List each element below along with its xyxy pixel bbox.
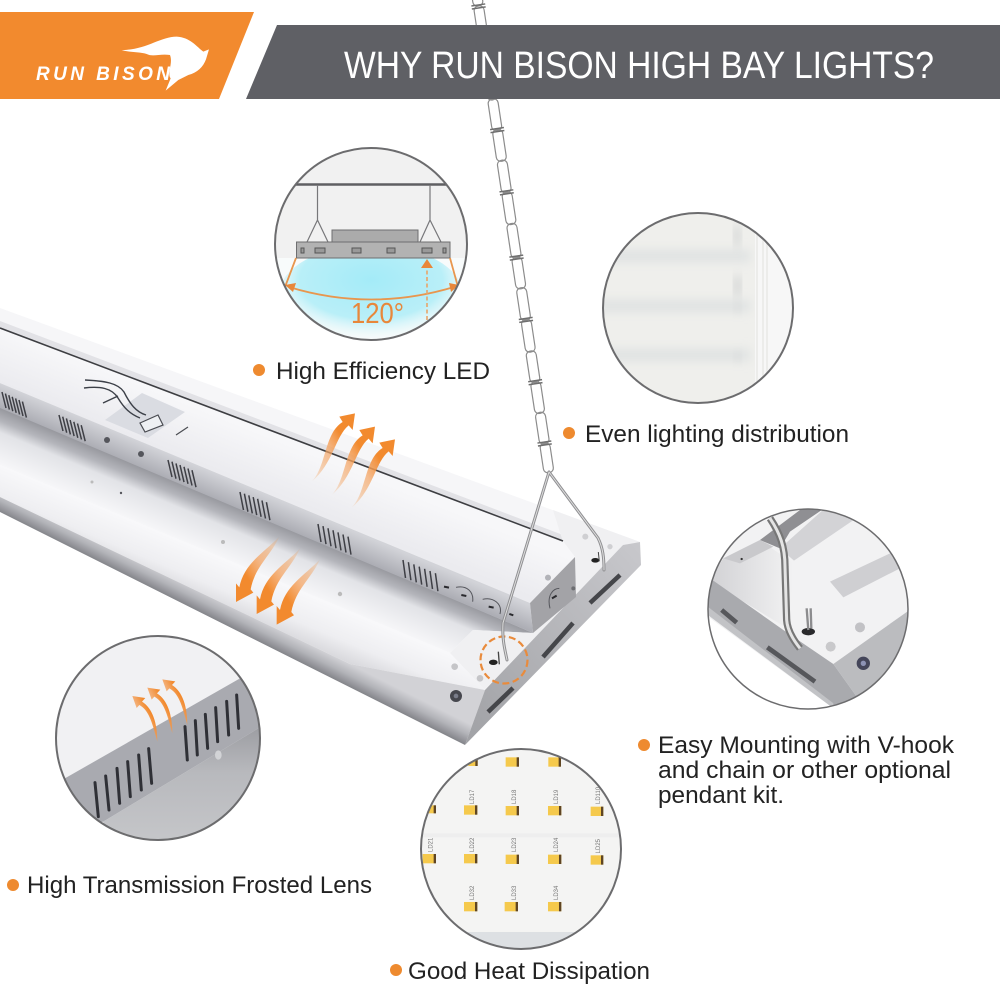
slots <box>722 610 815 682</box>
LED reference labels: LD22 <box>470 837 476 852</box>
label: Easy Mounting: Easy Mounting with V-hook <box>658 732 955 759</box>
fixture: end slots <box>488 575 620 712</box>
fixture: junction box details <box>444 534 613 702</box>
circle: LED board <box>417 745 627 955</box>
fixture: side face <box>0 497 485 745</box>
arc arrowheads <box>285 283 459 292</box>
LED reference labels: LD24 <box>554 837 560 852</box>
label: Easy Mounting: pendant kit. <box>658 782 784 809</box>
fixture: rivets and sensor <box>450 534 613 702</box>
fixture: driver box side <box>530 557 576 633</box>
fixture: vents <box>2 392 438 591</box>
arrows: heat falling <box>236 537 320 625</box>
arrows <box>132 679 187 742</box>
fixture: top flange <box>0 308 640 545</box>
slats <box>95 695 239 817</box>
sensor <box>857 657 870 670</box>
LEDs <box>423 757 603 911</box>
circle: frosted lens vents <box>50 630 267 847</box>
arrows: heat rising <box>312 413 395 508</box>
fixture: channel floor <box>0 405 533 653</box>
ceiling bar <box>296 183 446 186</box>
fixture: front panel <box>0 465 485 690</box>
fixture: driver box top <box>0 328 575 603</box>
fixture: dark seam <box>0 328 563 541</box>
LED reference labels: LD21 <box>429 837 435 852</box>
vent face <box>65 678 258 822</box>
LED reference labels: LD34 <box>554 885 560 900</box>
label: High Transmission Frosted Lens: High Transmission Frosted Lens <box>27 872 372 899</box>
label: High Efficiency LED: High Efficiency LED <box>276 358 490 385</box>
fixture box <box>332 230 418 242</box>
beam edges and arc <box>285 258 458 300</box>
fixture: end cap top <box>450 510 640 690</box>
channel light band <box>786 511 852 560</box>
title: WHY RUN BISON HIGH BAY LIGHTS? <box>344 45 934 87</box>
lower surface <box>103 728 259 839</box>
fixture: driver box front <box>0 383 533 633</box>
LED reference labels: LD33 <box>512 885 518 900</box>
beam glow <box>283 258 459 334</box>
lower rim <box>708 608 834 706</box>
LED reference labels: LD19 <box>554 789 560 804</box>
end bevel <box>834 612 908 696</box>
fixture: screw holes <box>90 437 342 596</box>
LED reference labels: LD17 <box>470 789 476 804</box>
V-hook rods <box>503 472 604 660</box>
LED reference labels: LD23 <box>512 837 518 852</box>
circle: beam angle diagram <box>270 145 470 348</box>
header bar <box>246 25 1000 99</box>
LED reference labels: LD18 <box>512 789 518 804</box>
fixture: dashed highlight ring <box>480 636 528 684</box>
light bands <box>604 250 748 360</box>
gray side face <box>703 580 857 708</box>
LED reference labels: LD32 <box>470 885 476 900</box>
hanging chain <box>467 0 556 474</box>
right edge <box>755 234 792 382</box>
label: Good Heat Dissipation: Good Heat Dissipation <box>408 958 650 985</box>
suspension wires <box>307 185 441 242</box>
V-hook rod <box>770 518 800 648</box>
height dashed arrow <box>426 266 428 320</box>
LED reference labels: LD110 <box>596 786 602 804</box>
label: Even lighting distribution: Even lighting distribution <box>585 421 849 448</box>
logo wordmark: RUN BISON <box>36 64 171 85</box>
channel strip <box>830 553 900 597</box>
white background area <box>710 618 830 708</box>
LED reference labels: LD25 <box>596 838 602 853</box>
hook hole <box>802 628 815 635</box>
top-left surface <box>713 548 772 618</box>
circle: V-hook mounting <box>707 508 909 710</box>
LED dark edges <box>434 757 603 911</box>
board bottom shade <box>468 932 574 948</box>
fixture: end bevel <box>465 542 641 745</box>
circle: even lighting <box>602 212 794 404</box>
fixture slots <box>301 248 446 253</box>
channel dark band <box>760 510 821 548</box>
logo bison <box>122 37 209 91</box>
fixture body <box>296 242 450 258</box>
fixture: wiring plate <box>84 380 188 438</box>
logo badge <box>0 12 254 99</box>
angle label: 120° <box>351 298 404 330</box>
blurred spots <box>732 227 742 295</box>
rivets <box>855 622 865 632</box>
light fixture <box>0 308 641 745</box>
label: Easy Mounting: and chain or other optional <box>658 757 951 784</box>
label: Easy Mounting <box>638 732 955 809</box>
LED reference labels <box>429 786 602 900</box>
